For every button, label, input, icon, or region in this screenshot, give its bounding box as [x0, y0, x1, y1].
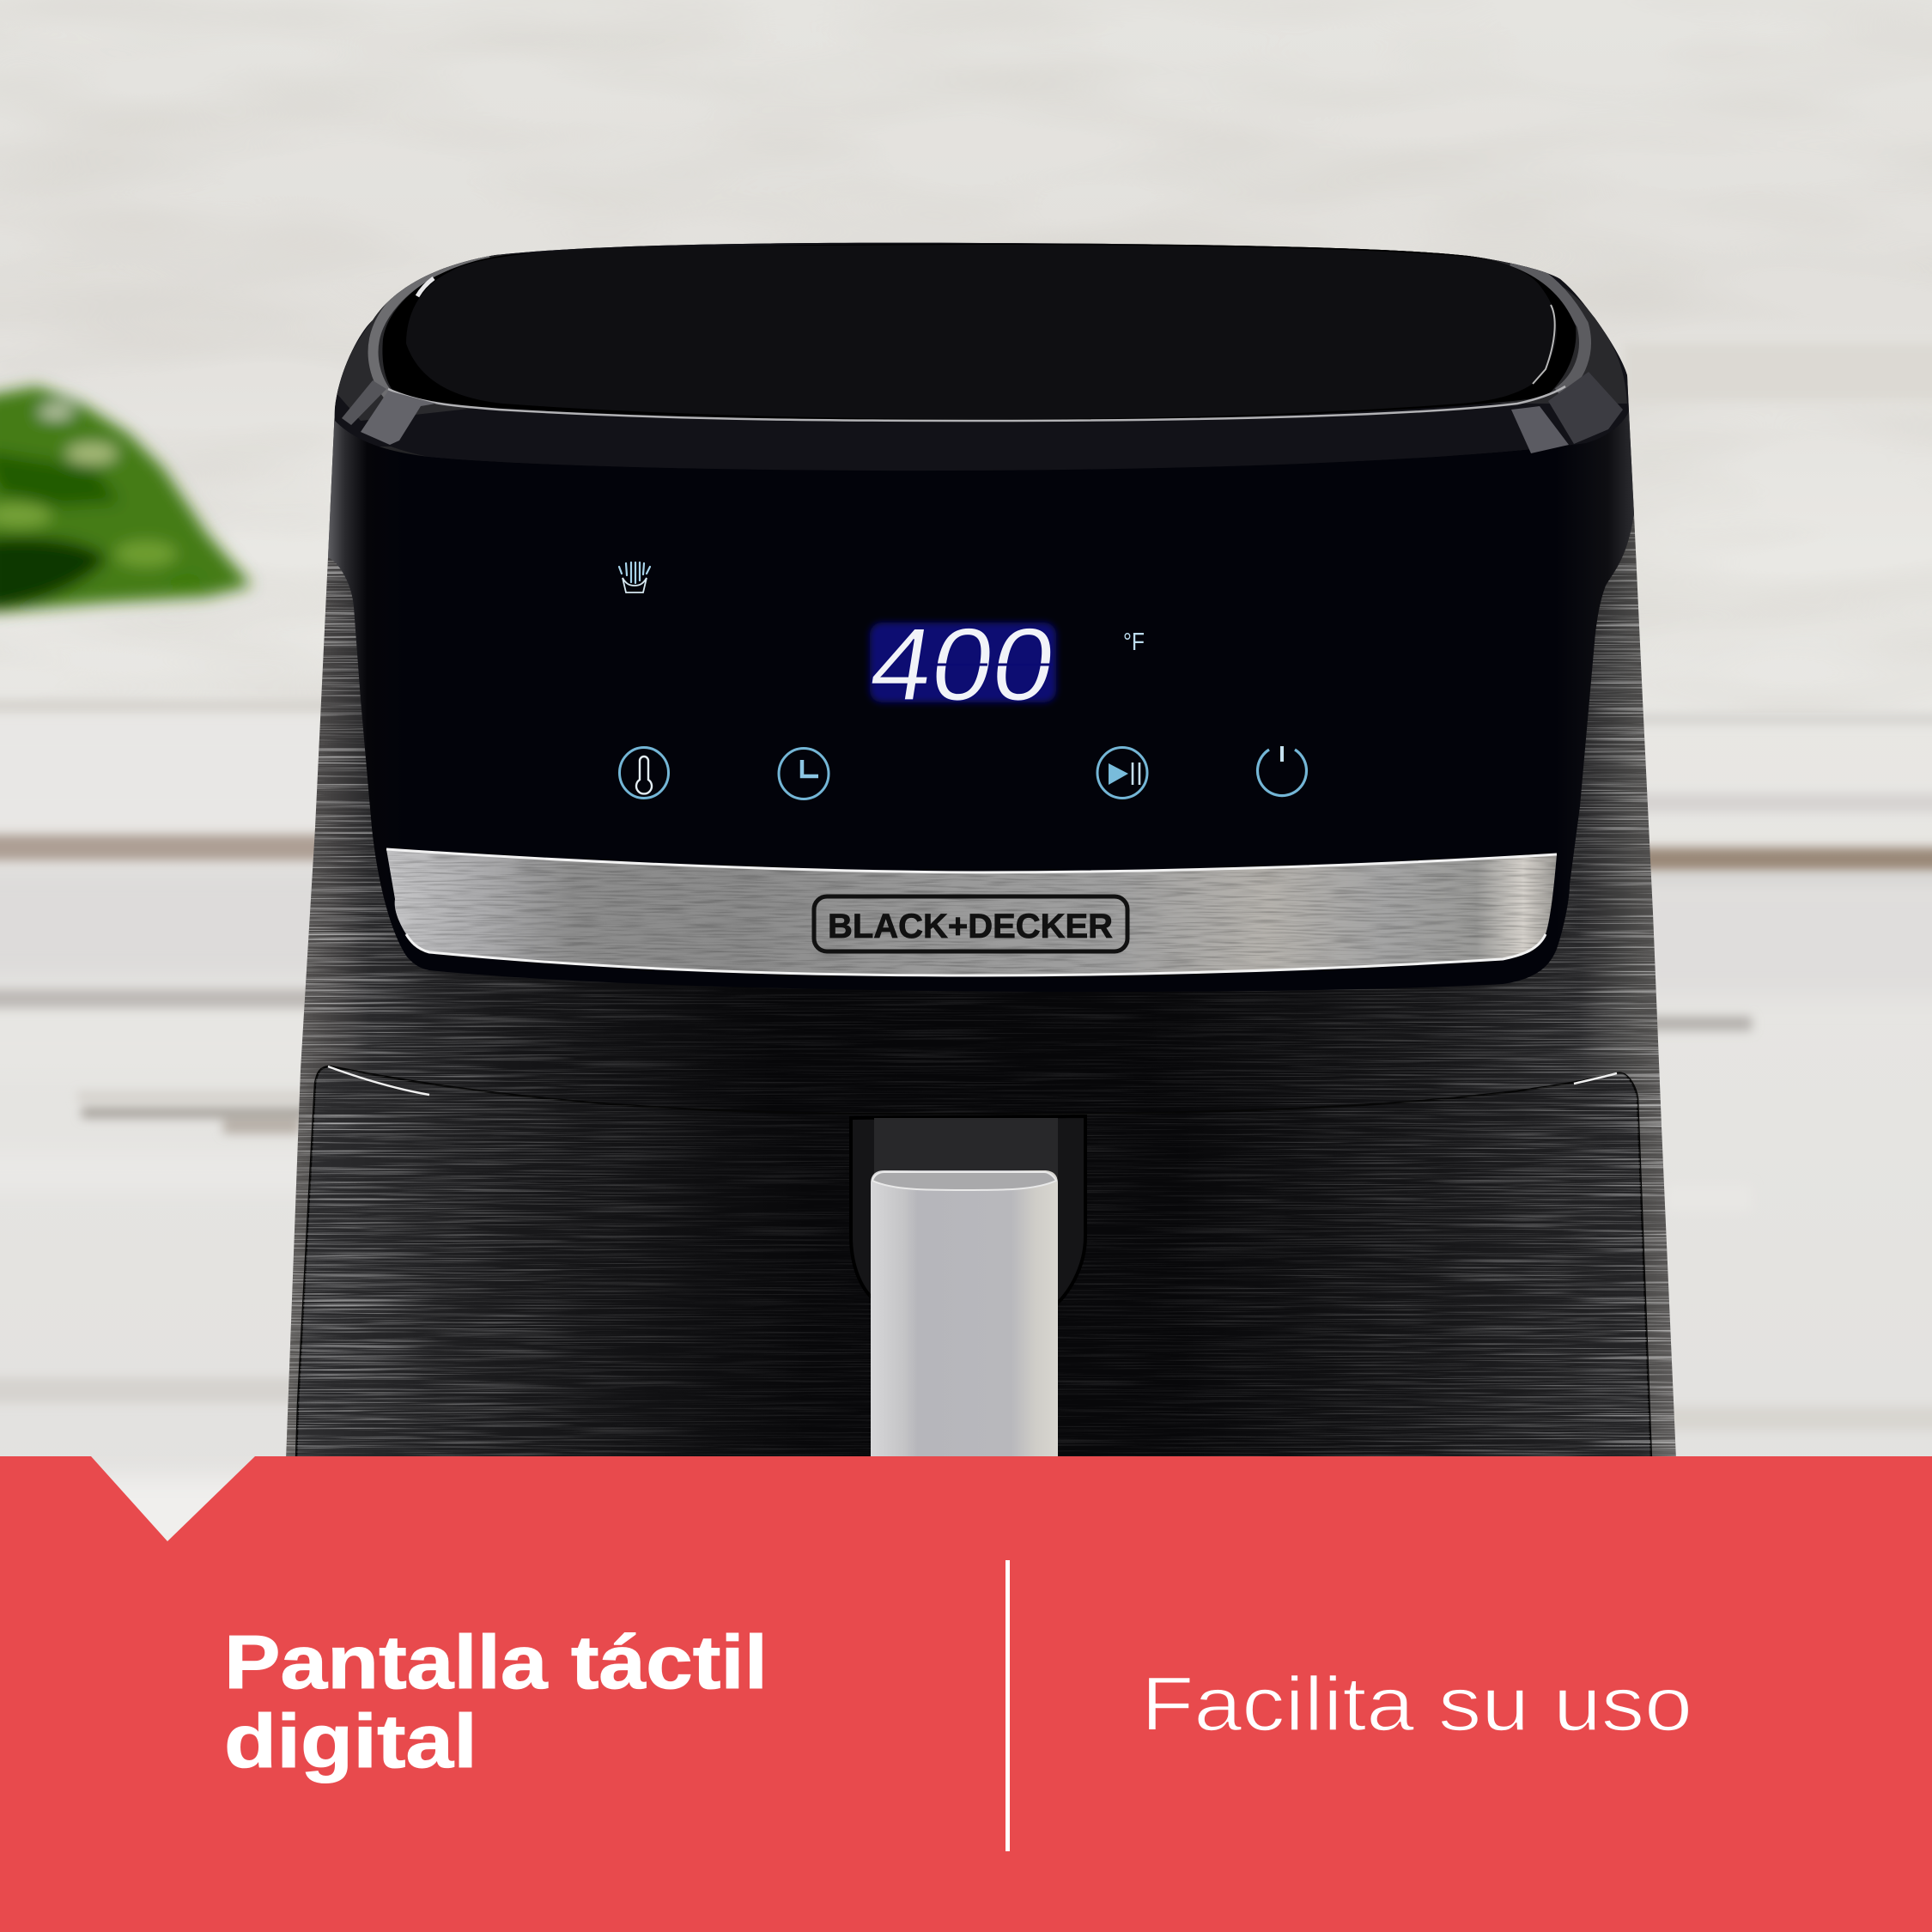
heading: Pantalla táctil digital — [224, 1619, 768, 1783]
divider line — [1005, 1560, 1010, 1851]
degrees unit: °F — [1123, 629, 1145, 656]
heading: Pantalla táctil digital: digital — [224, 1698, 477, 1783]
fryer body with brushed sides — [275, 232, 1692, 1468]
drawer — [292, 1065, 1657, 1460]
upper lid band — [335, 243, 1629, 447]
blurred green leaves — [0, 386, 252, 611]
lid rim and corner highlights — [336, 244, 1627, 453]
steel band — [386, 848, 1558, 977]
button: play pause — [1097, 747, 1147, 799]
air fryer — [275, 232, 1692, 1468]
icon: fries — [619, 562, 650, 592]
drawer handle — [851, 1116, 1085, 1460]
BLACK+DECKER logo — [814, 896, 1127, 951]
button: power — [1257, 746, 1306, 796]
glossy black control panel — [328, 408, 1634, 992]
heading: Pantalla táctil digital: Pantalla táctil — [224, 1619, 768, 1704]
red caption panel with notch — [0, 1456, 1932, 1932]
digital display: 400: 400 — [863, 607, 1063, 722]
button: temperature — [620, 747, 668, 799]
BLACK+DECKER logo: BLACK+DECKER — [828, 908, 1113, 945]
text: Facilita su uso: Facilita su uso — [1141, 1661, 1692, 1747]
lid band lower tint — [361, 404, 1619, 471]
button: timer — [779, 749, 829, 799]
